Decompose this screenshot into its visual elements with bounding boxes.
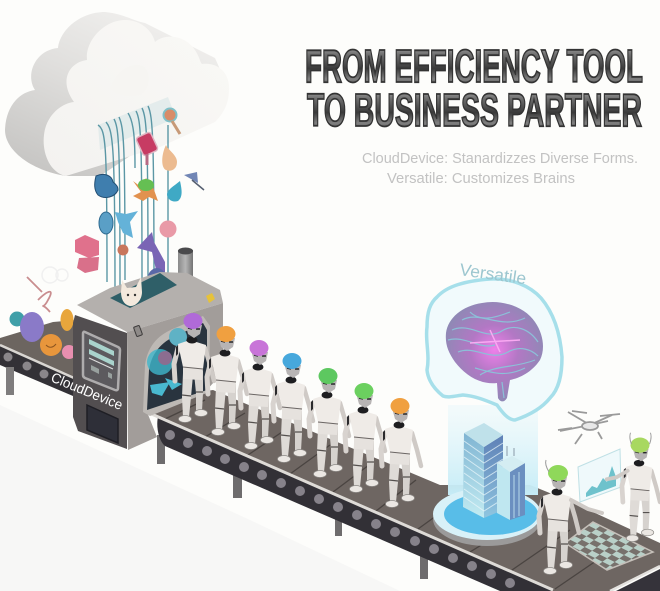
chessboard xyxy=(565,522,653,570)
slats xyxy=(165,400,612,589)
chamber interior xyxy=(147,323,207,410)
left conveyor xyxy=(0,320,77,396)
toy: pink ball xyxy=(160,220,176,238)
title xyxy=(305,40,643,136)
robot: green brain 1 xyxy=(309,368,349,478)
toy: blue blob xyxy=(147,268,167,294)
subtitle xyxy=(362,151,638,187)
top face xyxy=(77,272,223,332)
toy: pink ball xyxy=(62,345,76,359)
robot: green brain 2 xyxy=(345,383,385,492)
subtitle: CloudDevice: Stanardizzes Diverse Forms. xyxy=(362,151,638,167)
brain xyxy=(446,302,543,401)
toy: teal ball xyxy=(10,312,24,326)
toy: pink tangle xyxy=(27,277,51,312)
robot: orange brain 1 xyxy=(207,326,247,436)
toy: blue capsule xyxy=(99,212,113,234)
cloud xyxy=(5,12,229,176)
short tower xyxy=(497,446,525,520)
robot: front green brain xyxy=(539,460,602,574)
toy: purple horn xyxy=(137,232,165,276)
robots in line xyxy=(174,313,421,508)
end rail xyxy=(610,566,660,591)
CloudDevice machine xyxy=(49,248,223,450)
machine label: CloudDevice xyxy=(49,369,125,413)
sketch rings xyxy=(42,267,68,283)
toy: white cat xyxy=(121,277,142,306)
hologram beam xyxy=(448,405,538,495)
toy: peach drop xyxy=(162,145,177,171)
hopper opening xyxy=(110,273,177,308)
toy: small bird xyxy=(184,172,204,190)
toy: pink cube xyxy=(75,235,99,273)
toy: brown small xyxy=(118,244,128,256)
opening frame xyxy=(143,316,210,416)
toy: teal drop xyxy=(167,181,182,202)
legs xyxy=(157,435,428,579)
leg xyxy=(6,367,14,395)
yellow button xyxy=(206,293,215,303)
toy: blue bird xyxy=(95,174,118,197)
status screen xyxy=(83,332,120,390)
rail xyxy=(147,412,553,590)
subtitle: Versatile: Customizes Brains xyxy=(387,171,575,187)
toy: red gem xyxy=(136,132,158,165)
robot: blue brain xyxy=(273,353,313,462)
holographic platform xyxy=(433,488,541,546)
falling toys xyxy=(75,108,204,294)
drone xyxy=(558,411,620,444)
rollers xyxy=(165,430,515,588)
main conveyor xyxy=(147,390,660,591)
toy: orange rabbit xyxy=(60,309,74,331)
toy: blue star xyxy=(115,211,138,238)
holographic chart xyxy=(578,449,621,502)
robot: purple brain 1 xyxy=(174,313,214,422)
floor shadow xyxy=(0,405,400,591)
toy: purple blob xyxy=(20,312,44,342)
brain bubble xyxy=(427,279,562,420)
chimney xyxy=(178,248,193,296)
toy: green star creature xyxy=(133,178,158,201)
waiting toys on left belt xyxy=(10,267,76,359)
dark front face xyxy=(73,315,127,449)
data strands xyxy=(98,106,168,295)
robot: right green brain xyxy=(607,433,660,542)
belt surface xyxy=(147,390,660,591)
toy: round tag xyxy=(164,108,180,134)
device icon xyxy=(133,325,143,337)
robot: orange brain 2 xyxy=(381,398,421,508)
toy: orange smiley xyxy=(40,334,62,356)
door xyxy=(87,405,118,443)
versatile label: Versatile xyxy=(458,260,527,288)
tall tower xyxy=(463,423,503,518)
cloud slot xyxy=(98,97,176,150)
dark band xyxy=(157,417,553,591)
end panel xyxy=(616,569,660,591)
robot: purple brain 2 xyxy=(240,340,280,450)
skyscrapers xyxy=(463,423,525,520)
right face xyxy=(127,303,223,450)
